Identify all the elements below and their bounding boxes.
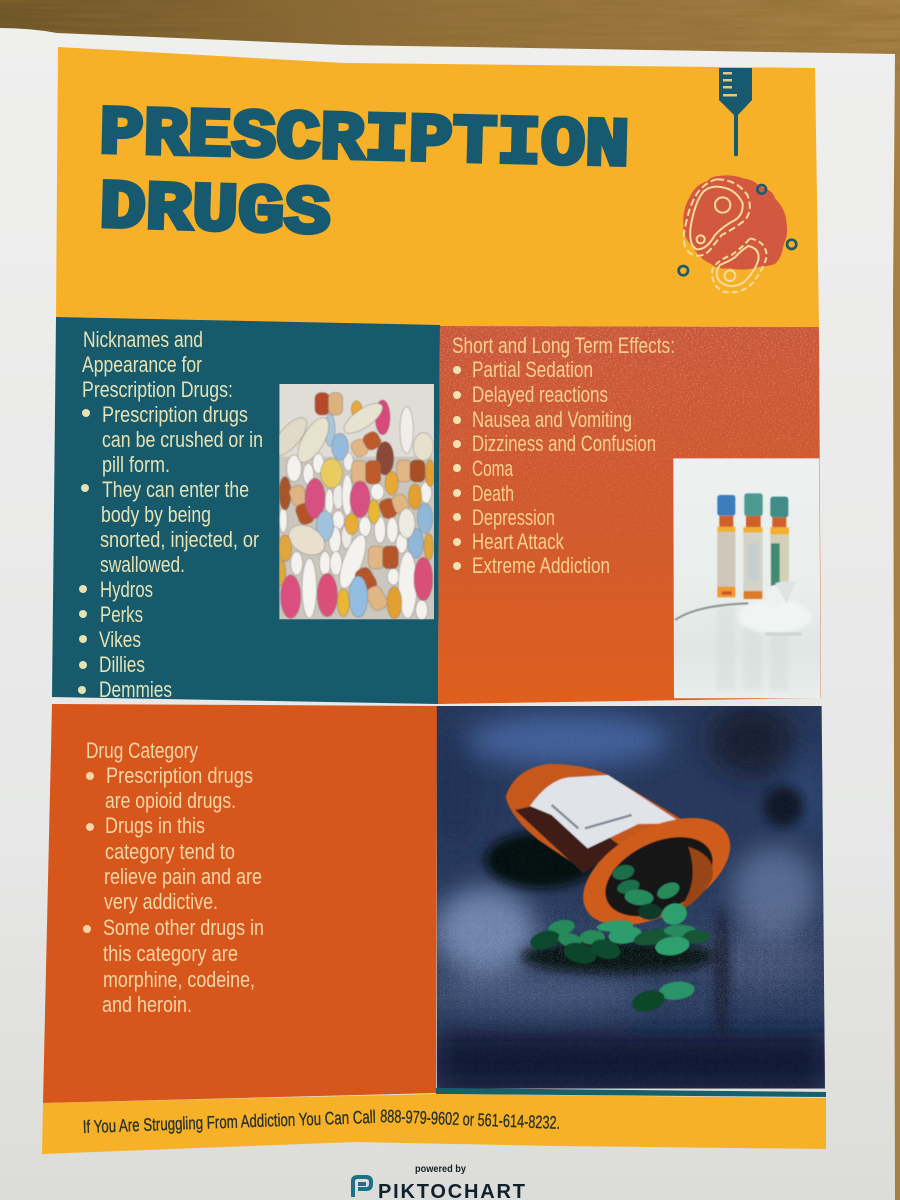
nicknames text block: can be crushed or in <box>102 427 263 452</box>
drug category text block: morphine, codeine, <box>103 967 255 992</box>
effects text block: Depression <box>472 505 555 530</box>
drug category text block: and heroin. <box>102 992 192 1017</box>
nicknames text block: swallowed. <box>100 552 185 577</box>
effects text block: Short and Long Term Effects: <box>452 333 675 358</box>
drug category text block: category tend to <box>105 839 235 864</box>
drug category text block <box>83 738 264 1017</box>
nicknames text block: Vikes <box>99 627 141 652</box>
drug category text block: are opioid drugs. <box>105 788 236 813</box>
nicknames text block: Nicknames and <box>83 327 203 352</box>
powered by Piktochart logo: powered by <box>415 1163 466 1175</box>
drug category text block: Drug Category <box>86 738 198 763</box>
photo: spilled pill bottle <box>428 703 828 1090</box>
drug category text block: Some other drugs in <box>103 915 264 940</box>
nicknames text block: Dillies <box>99 652 145 677</box>
icon: red cell blob with dashed capsules <box>679 175 796 292</box>
effects text block <box>452 333 675 578</box>
nicknames text block: pill form. <box>102 452 170 477</box>
nicknames text block: Hydros <box>100 577 153 602</box>
panel: yellow footer <box>42 1094 826 1154</box>
title <box>98 96 630 254</box>
drug category text block: very addictive. <box>104 889 218 914</box>
footer helpline text: If You Are Struggling From Addiction You Can Call <box>82 1107 376 1137</box>
powered by Piktochart logo <box>353 1163 525 1200</box>
nicknames text block <box>78 327 263 702</box>
effects text block: Nausea and Vomiting <box>472 407 632 432</box>
effects text block: Dizziness and Confusion <box>472 431 656 456</box>
nicknames text block: Appearance for <box>82 352 202 377</box>
panel: nicknames and appearance <box>52 317 440 704</box>
speckled print texture on effects panel <box>439 326 820 570</box>
nicknames text block: Perks <box>100 602 143 627</box>
nicknames text block: Prescription drugs <box>102 402 248 427</box>
nicknames text block: body by being <box>101 502 211 527</box>
effects text block: Coma <box>472 456 514 481</box>
panel: short and long term effects <box>438 326 821 704</box>
effects text block: Heart Attack <box>472 529 565 554</box>
nicknames text block: Demmies <box>99 677 172 702</box>
effects text block: Death <box>472 481 514 506</box>
photo: blood sample tubes <box>673 458 821 698</box>
nicknames text block: They can enter the <box>102 477 249 502</box>
effects text block: Partial Sedation <box>472 357 593 382</box>
panel: drug category <box>43 704 437 1103</box>
photo: colourful pills <box>267 384 435 620</box>
nicknames text block: Prescription Drugs: <box>82 377 233 402</box>
drug category text block: Prescription drugs <box>106 763 253 788</box>
nicknames text block: snorted, injected, or <box>100 527 259 552</box>
teal strip under photo <box>436 1088 826 1097</box>
title: DRUGS <box>98 170 332 254</box>
title: PRESCRIPTION <box>98 96 630 186</box>
panel: yellow title header <box>56 47 819 327</box>
drug category text block: relieve pain and are <box>104 864 262 889</box>
icon: syringe <box>719 68 752 156</box>
footer helpline text: 888-979-9602 or 561-614-8232. <box>380 1106 560 1133</box>
effects text block: Extreme Addiction <box>472 553 610 578</box>
effects text block: Delayed reactions <box>472 382 608 407</box>
drug category text block: Drugs in this <box>105 813 205 838</box>
drug category text block: this category are <box>103 941 238 966</box>
